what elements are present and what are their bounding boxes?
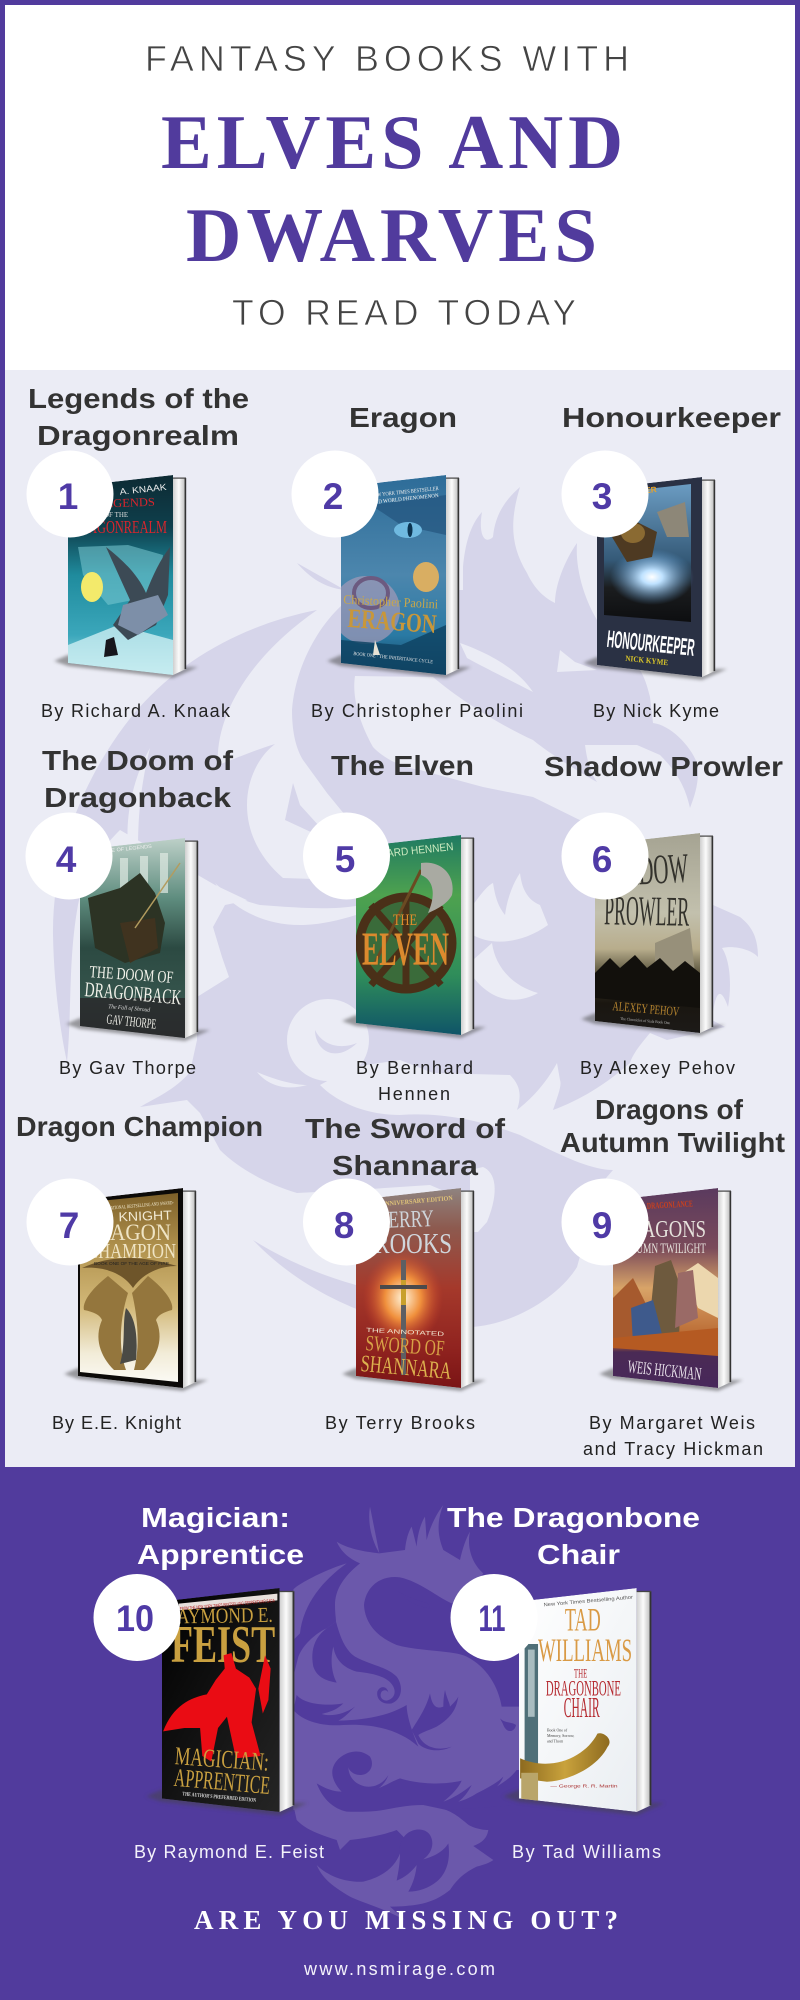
book cover: Dragons of Autumn Twilight: DRAGONS xyxy=(616,1217,706,1243)
book entry 1 xyxy=(26,383,249,721)
book cover: The Dragonbone Chair: Memory, Sorrow, xyxy=(547,1734,574,1739)
book cover: Dragons of Autumn Twilight: AUTUMN TWILIGHT xyxy=(617,1241,706,1257)
footer website: www.nsmirage.com xyxy=(303,1959,495,1979)
title line: dwarves: DWARVES xyxy=(186,192,602,278)
book cover: The Doom of Dragonback: THE DOOM OF xyxy=(89,962,174,987)
book cover: Eragon: AND WORLD PHENOMENON xyxy=(371,493,439,506)
author: By Terry Brooks xyxy=(325,1413,475,1433)
number badge 3: 3 xyxy=(592,476,612,517)
number badge 5 xyxy=(303,812,390,900)
number badge 3 xyxy=(562,450,648,538)
book cover: Dragon Champion: NATIONAL BESTSELLING AND AWARD- xyxy=(108,1201,174,1212)
book cover: Magician Apprentice: RAYMOND E. xyxy=(165,1603,273,1629)
book cover: The Sword of Shannara: TERRY xyxy=(377,1206,434,1234)
number badge 4: 4 xyxy=(56,839,77,880)
book cover: The Dragonbone Chair: TAD xyxy=(565,1603,601,1639)
book cover: Shadow Prowler: PROWLER xyxy=(604,888,690,936)
title: The Dragonbone xyxy=(447,1502,700,1533)
title: Legends of the xyxy=(28,383,249,414)
number badge 10 xyxy=(94,1574,180,1661)
book cover: Magician Apprentice: THE AUTHOR'S PREFERRED EDITION xyxy=(182,1791,256,1804)
title: Shadow Prowler xyxy=(544,751,783,782)
book cover: The Doom of Dragonback: TIME OF LEGENDS xyxy=(102,844,153,855)
number badge 11: 11 xyxy=(478,1598,506,1639)
book cover: Legends of the Dragonrealm: DRAGONREALM xyxy=(71,517,167,537)
book cover: Dragon Champion: CHAMPION xyxy=(87,1239,176,1263)
number badge 7: 7 xyxy=(59,1205,79,1246)
author: Hennen xyxy=(378,1084,450,1104)
number badge 6: 6 xyxy=(592,839,612,880)
book cover: The Dragonbone Chair: THE xyxy=(574,1667,587,1681)
number badge 1: 1 xyxy=(58,476,78,517)
book cover: The Doom of Dragonback: The Fall of Shroud xyxy=(108,1003,151,1014)
title xyxy=(28,383,249,451)
book cover: Dragon Champion: DRAGON xyxy=(81,1220,171,1245)
book cover: Dragons of Autumn Twilight: WEIS HICKMAN xyxy=(627,1356,702,1384)
title: Eragon xyxy=(349,402,457,433)
number badge 10: 10 xyxy=(116,1598,154,1639)
title xyxy=(447,1502,700,1570)
book cover: Magician Apprentice xyxy=(146,1588,308,1815)
author: By Raymond E. Feist xyxy=(134,1842,324,1862)
number badge 2 xyxy=(292,450,378,538)
book cover: The Sword of Shannara: SHANNARA xyxy=(360,1351,453,1385)
book cover: Legends of the Dragonrealm: LEGENDS xyxy=(98,495,155,511)
book cover: Shadow Prowler: SHADOW xyxy=(595,846,690,896)
author xyxy=(356,1058,473,1104)
book cover: Eragon: Christopher Paolini xyxy=(343,592,439,611)
dragon watermark: purple panel xyxy=(293,1505,520,1920)
book cover: The Dragonbone Chair: CHAIR xyxy=(564,1693,600,1724)
book cover: Dragon Champion: BOOK ONE OF THE AGE OF FIRE xyxy=(94,1261,169,1266)
number badge 8 xyxy=(303,1178,390,1266)
number badge 8: 8 xyxy=(334,1205,354,1246)
book cover: Shadow Prowler xyxy=(581,833,725,1036)
number badge 1 xyxy=(26,450,114,538)
title line: fantasy books with: FANTASY BOOKS WITH xyxy=(145,38,634,79)
number badge 11 xyxy=(450,1574,538,1661)
number badge 2: 2 xyxy=(323,476,343,517)
author: By Richard A. Knaak xyxy=(41,701,231,721)
book cover: The Elven xyxy=(342,835,486,1038)
number badge 6 xyxy=(562,812,648,900)
author: By E.E. Knight xyxy=(52,1413,181,1433)
title: Honourkeeper xyxy=(562,402,781,433)
book cover: The Dragonbone Chair: New York Times Bestselling Author xyxy=(543,1595,634,1608)
book cover: The Dragonbone Chair: — George R. R. Martin xyxy=(550,1783,619,1788)
book cover: The Dragonbone Chair: Book One of xyxy=(547,1728,568,1732)
footer call to action: ARE YOU MISSING OUT? xyxy=(194,1905,618,1935)
book cover: Dragon Champion: E.E. KNIGHT xyxy=(88,1207,172,1225)
author: By Bernhard xyxy=(356,1058,473,1078)
book cover: Eragon: BOOK ONE · THE INHERITANCE CYCLE xyxy=(353,652,433,665)
book cover: The Sword of Shannara: THE ANNOTATED xyxy=(366,1328,445,1338)
title xyxy=(560,1094,785,1158)
book cover: The Doom of Dragonback: DRAGONBACK xyxy=(84,977,182,1009)
title xyxy=(137,1502,304,1570)
book cover: The Elven: BERNHARD HENNEN xyxy=(351,841,454,864)
panel: books 1 to 9 xyxy=(5,370,795,1467)
book cover: Shadow Prowler: ALEXEY PEHOV xyxy=(612,998,680,1019)
title: Dragonrealm xyxy=(37,420,239,451)
number badge 9: 9 xyxy=(592,1205,612,1246)
book cover: Dragon Champion xyxy=(64,1188,208,1391)
book cover: The Sword of Shannara xyxy=(342,1188,486,1391)
title: Chair xyxy=(537,1539,620,1570)
number badge 9 xyxy=(562,1178,648,1266)
book cover: Magician Apprentice: FROM THE NEW YORK TIMES BESTSELLING SERPENTWAR SAGA xyxy=(180,1598,276,1611)
book cover: The Dragonbone Chair: DRAGONBONE xyxy=(546,1676,621,1701)
book cover: Honourkeeper xyxy=(583,477,727,680)
book cover: The Doom of Dragonback: GAV THORPE xyxy=(106,1013,157,1033)
book cover: The Dragonbone Chair: and Thorn xyxy=(547,1740,563,1744)
book entry 6 xyxy=(544,751,783,1078)
book cover: The Sword of Shannara: ANNIVERSARY EDITION xyxy=(381,1195,453,1208)
title: The Elven xyxy=(331,750,474,781)
book cover: Legends of the Dragonrealm xyxy=(54,475,198,678)
book cover: Legends of the Dragonrealm: OF THE xyxy=(104,511,128,519)
title line: elves and: ELVES AND xyxy=(161,99,628,185)
book entry 4 xyxy=(26,745,234,1078)
book entry 11 xyxy=(447,1502,700,1862)
title: The Sword of xyxy=(305,1113,506,1144)
book cover: Legends of the Dragonrealm: A. KNAAK xyxy=(119,482,167,497)
book entry 10 xyxy=(94,1502,324,1862)
book cover: Eragon: ERAGON xyxy=(347,603,438,639)
panel: header xyxy=(5,5,795,370)
title: Apprentice xyxy=(137,1539,304,1570)
book entry 3 xyxy=(562,402,781,721)
title xyxy=(42,745,234,813)
book entry 7 xyxy=(16,1111,263,1433)
book cover: The Dragonbone Chair: WILLIAMS xyxy=(538,1633,632,1669)
author: By Nick Kyme xyxy=(593,701,719,721)
author: By Margaret Weis xyxy=(589,1413,755,1433)
title: Dragon Champion xyxy=(16,1111,263,1142)
author: By Tad Williams xyxy=(512,1842,661,1862)
book cover: Honourkeeper: NICK KYME xyxy=(625,654,669,667)
book cover: The Dragonbone Chair xyxy=(503,1588,665,1815)
book cover: Magician Apprentice: MAGICIAN: xyxy=(174,1741,270,1777)
title xyxy=(305,1113,506,1181)
title: The Doom of xyxy=(42,745,234,776)
author: By Gav Thorpe xyxy=(59,1058,196,1078)
book cover: Dragons of Autumn Twilight: DRAGONLANCE xyxy=(647,1198,693,1211)
book cover: The Sword of Shannara: SWORD OF xyxy=(365,1330,445,1361)
book cover: The Elven: THE xyxy=(393,912,417,929)
book cover: The Sword of Shannara: BROOKS xyxy=(359,1229,452,1260)
title: Autumn Twilight xyxy=(560,1127,785,1158)
book entry 9 xyxy=(560,1094,785,1459)
number badge 4 xyxy=(26,812,112,900)
author: By Christopher Paolini xyxy=(311,701,523,721)
author: By Alexey Pehov xyxy=(580,1058,735,1078)
dragon cut: stripes and swirl xyxy=(127,643,597,1232)
book cover: Magician Apprentice: APPRENTICE xyxy=(173,1763,271,1800)
book cover: Dragons of Autumn Twilight xyxy=(599,1188,743,1391)
title: Dragonback xyxy=(44,782,231,813)
author xyxy=(583,1413,763,1459)
title: Magician: xyxy=(141,1502,290,1533)
book entry 8 xyxy=(303,1113,506,1433)
number badge 5: 5 xyxy=(335,839,355,880)
title: Dragons of xyxy=(595,1094,744,1125)
book cover: Eragon: NEW YORK TIMES BESTSELLER xyxy=(371,486,439,499)
book cover: Magician Apprentice: FEIST xyxy=(171,1616,275,1674)
number badge 7 xyxy=(26,1178,114,1266)
book cover: Eragon xyxy=(327,475,471,678)
title: Shannara xyxy=(332,1150,478,1181)
book cover: The Elven: ELVEN xyxy=(362,923,449,976)
book entry 5 xyxy=(303,750,486,1104)
book cover: Honourkeeper: MMER xyxy=(631,485,657,497)
book cover: Shadow Prowler: The Chronicles of Siala Book One xyxy=(620,1016,670,1025)
book entry 2 xyxy=(292,402,523,721)
author: and Tracy Hickman xyxy=(583,1439,763,1459)
title line: to read today: TO READ TODAY xyxy=(232,292,581,333)
dragon watermark: light panel xyxy=(53,487,758,1328)
book cover: The Doom of Dragonback xyxy=(66,838,210,1041)
